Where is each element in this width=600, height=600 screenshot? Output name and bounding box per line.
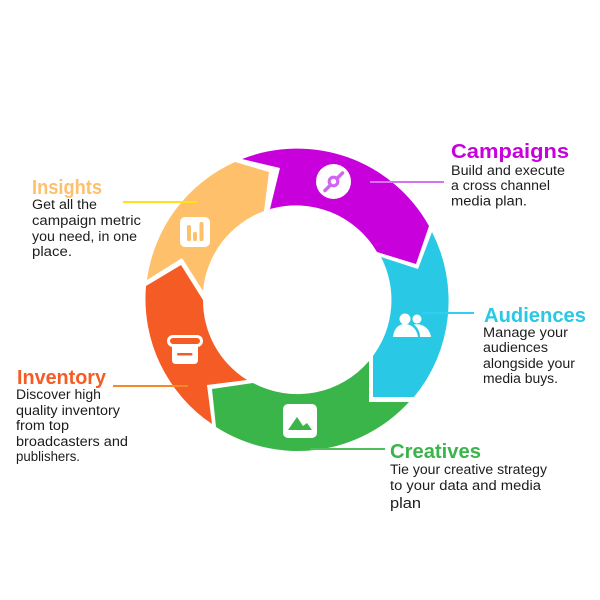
text block: Creatives: Creatives bbox=[390, 441, 481, 463]
text block: Campaigns: media plan. bbox=[451, 194, 527, 208]
text block: Insights: place. bbox=[32, 244, 72, 259]
text block: Audiences: audiences bbox=[483, 340, 548, 355]
segment: Audiences bbox=[373, 232, 449, 397]
segment: Insights bbox=[147, 162, 269, 291]
text block: Audiences bbox=[483, 305, 586, 386]
text block: Inventory: publishers. bbox=[16, 449, 80, 464]
text block: Audiences: Manage your bbox=[483, 325, 569, 340]
icon: image bbox=[283, 404, 317, 438]
text block: Insights: campaign metric bbox=[32, 213, 141, 228]
leader line: Audiences bbox=[422, 312, 474, 314]
segment: Campaigns bbox=[242, 149, 429, 264]
segment: Creatives bbox=[212, 361, 409, 451]
text block: Audiences: alongside your bbox=[483, 356, 576, 371]
icon: audience people bbox=[393, 314, 431, 337]
text block: Inventory: quality inventory bbox=[16, 403, 120, 418]
text block: Inventory: from top bbox=[16, 418, 69, 433]
text block: Insights: Get all the bbox=[32, 197, 97, 212]
text block: Audiences: Audiences bbox=[484, 305, 586, 327]
leader line: Campaigns bbox=[370, 181, 444, 183]
icon: archive box bbox=[168, 336, 202, 364]
leader line: Creatives bbox=[310, 448, 385, 450]
text block: Inventory: Discover high bbox=[16, 387, 101, 402]
icon: bar chart bbox=[180, 217, 210, 247]
text block: Inventory: broadcasters and bbox=[16, 434, 128, 449]
text block: Creatives: plan bbox=[390, 496, 421, 512]
segment: Inventory bbox=[145, 265, 247, 424]
text block: Insights bbox=[32, 177, 141, 259]
leader line: Inventory bbox=[113, 385, 188, 387]
text block: Audiences: media buys. bbox=[483, 371, 558, 386]
text block: Campaigns: Campaigns bbox=[451, 141, 569, 163]
text block: Insights: you need, in one bbox=[32, 229, 137, 244]
text block: Inventory bbox=[16, 367, 128, 464]
text block: Creatives bbox=[390, 441, 547, 512]
icon: compass bbox=[316, 164, 351, 199]
text block: Campaigns: Build and execute bbox=[451, 163, 565, 178]
text block: Creatives: Tie your creative strategy bbox=[390, 462, 547, 477]
text block: Creatives: to your data and media bbox=[390, 478, 542, 493]
leader line: Insights bbox=[123, 201, 197, 203]
text block: Campaigns bbox=[451, 141, 569, 208]
text block: Inventory: Inventory bbox=[17, 367, 107, 389]
text block: Campaigns: a cross channel bbox=[451, 178, 550, 193]
text block: Insights: Insights bbox=[32, 177, 102, 199]
